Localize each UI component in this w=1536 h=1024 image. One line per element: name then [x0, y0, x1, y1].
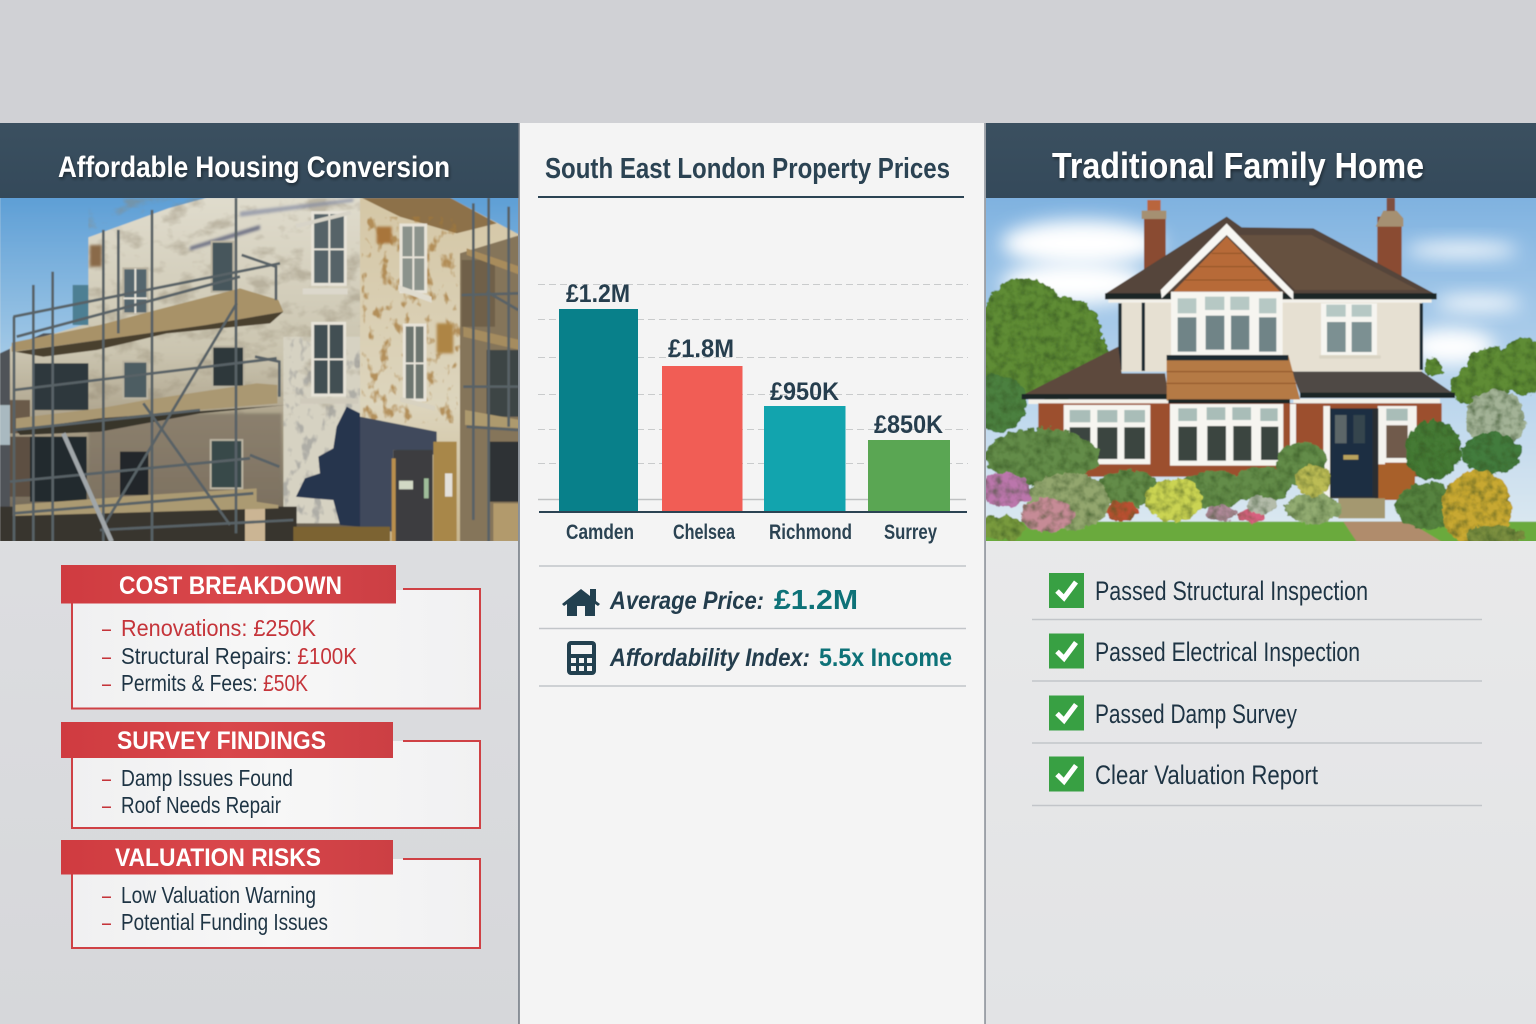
photo: family house with garden — [970, 197, 1536, 547]
dark damp patch — [296, 407, 360, 527]
item: clear valuation report: Clear Valuation Report — [1095, 760, 1318, 790]
lower windows — [1064, 405, 1150, 464]
valuation items: – — [102, 882, 112, 908]
item: passed damp survey: Passed Damp Survey — [1095, 699, 1297, 729]
door — [393, 450, 433, 542]
right panel header — [986, 123, 1536, 198]
survey items — [102, 765, 293, 818]
item: passed damp survey — [1049, 696, 1297, 730]
cost items: Structural Repairs: £100K — [121, 643, 357, 669]
chimneys — [1144, 215, 1166, 272]
lower brick wall — [1038, 403, 1442, 477]
bar: Chelsea: £1.8M — [668, 335, 734, 363]
upper right window — [1321, 303, 1377, 355]
bar: Richmond: £950K — [770, 378, 839, 406]
stat: affordability index: 5.5x Income — [819, 644, 952, 672]
stat: average price: £1.2M — [774, 584, 858, 615]
icon: house — [562, 589, 600, 616]
item: passed structural inspection: Passed Structural Inspection — [1095, 576, 1368, 606]
bar: Surrey: £850K — [874, 411, 943, 439]
left panel header — [0, 123, 519, 198]
bar: Surrey: Surrey — [884, 521, 937, 544]
clouds — [1002, 220, 1522, 365]
upper walls — [1120, 300, 1422, 372]
front facade — [10, 198, 360, 542]
side facade — [360, 198, 520, 542]
cost items: – — [102, 615, 112, 641]
shrubs — [978, 420, 1525, 547]
bar chart — [538, 280, 968, 544]
valuation items — [102, 882, 328, 935]
panel: property prices — [519, 123, 985, 1024]
valuation items: Potential Funding Issues — [121, 909, 328, 935]
callout: valuation risks — [61, 840, 480, 948]
survey items: Roof Needs Repair — [121, 792, 281, 818]
gable — [1173, 237, 1280, 292]
porch and door — [1290, 404, 1296, 447]
bar: Chelsea — [662, 335, 742, 544]
callout: survey findings: SURVEY FINDINGS — [117, 727, 326, 755]
stat: affordability index — [567, 641, 952, 675]
callout: valuation risks: VALUATION RISKS — [115, 844, 321, 872]
cost items: Permits & Fees: £50K — [121, 670, 308, 696]
stat: average price: Average Price: — [609, 587, 764, 615]
valuation items: Low Valuation Warning — [121, 882, 316, 908]
checklist — [1032, 573, 1482, 806]
chart heading: South East London Property Prices — [545, 153, 950, 185]
bar: Camden: £1.2M — [566, 280, 630, 308]
upper bay window — [1171, 292, 1283, 357]
facade weathering — [88, 198, 360, 415]
callout: cost breakdown: COST BREAKDOWN — [119, 572, 342, 600]
valuation items: – — [102, 909, 112, 935]
item: passed electrical inspection — [1049, 634, 1360, 668]
cost items: Renovations: £250K — [121, 615, 316, 641]
survey items: Damp Issues Found — [121, 765, 293, 791]
item: passed electrical inspection: Passed Electrical Inspection — [1095, 637, 1360, 667]
windows — [313, 213, 426, 400]
bar: Chelsea: Chelsea — [673, 521, 735, 544]
lower roofs — [1025, 347, 1168, 395]
cost items: – — [102, 643, 112, 669]
bar: Camden — [559, 280, 638, 544]
panel: affordable housing conversion — [0, 123, 520, 1024]
scaffold tubes — [10, 198, 518, 542]
callout: cost breakdown — [61, 565, 480, 708]
right panel header: Traditional Family Home — [1052, 145, 1424, 186]
scaffold platforms — [12, 288, 283, 352]
cost items — [102, 615, 357, 696]
bar: Camden: Camden — [566, 521, 634, 544]
survey items: – — [102, 792, 112, 818]
lawn and path — [986, 520, 1536, 541]
trees — [970, 278, 1536, 450]
stat: affordability index: Affordability Index: — [609, 644, 810, 672]
icon: calculator — [567, 641, 596, 675]
bar: Richmond: Richmond — [769, 521, 852, 544]
callout: survey findings — [61, 722, 480, 828]
survey items: – — [102, 765, 112, 791]
main roof — [1105, 217, 1435, 299]
photo: building under scaffolding — [0, 197, 520, 543]
bar: Richmond — [764, 378, 852, 544]
item: clear valuation report — [1049, 756, 1318, 792]
bar: Surrey — [868, 411, 950, 544]
stat: average price — [562, 584, 858, 616]
bay tile — [1167, 355, 1300, 401]
cost items: – — [102, 670, 112, 696]
left panel header: Affordable Housing Conversion — [58, 151, 450, 184]
panel: traditional family home — [970, 123, 1536, 1024]
item: passed structural inspection — [1049, 573, 1368, 608]
